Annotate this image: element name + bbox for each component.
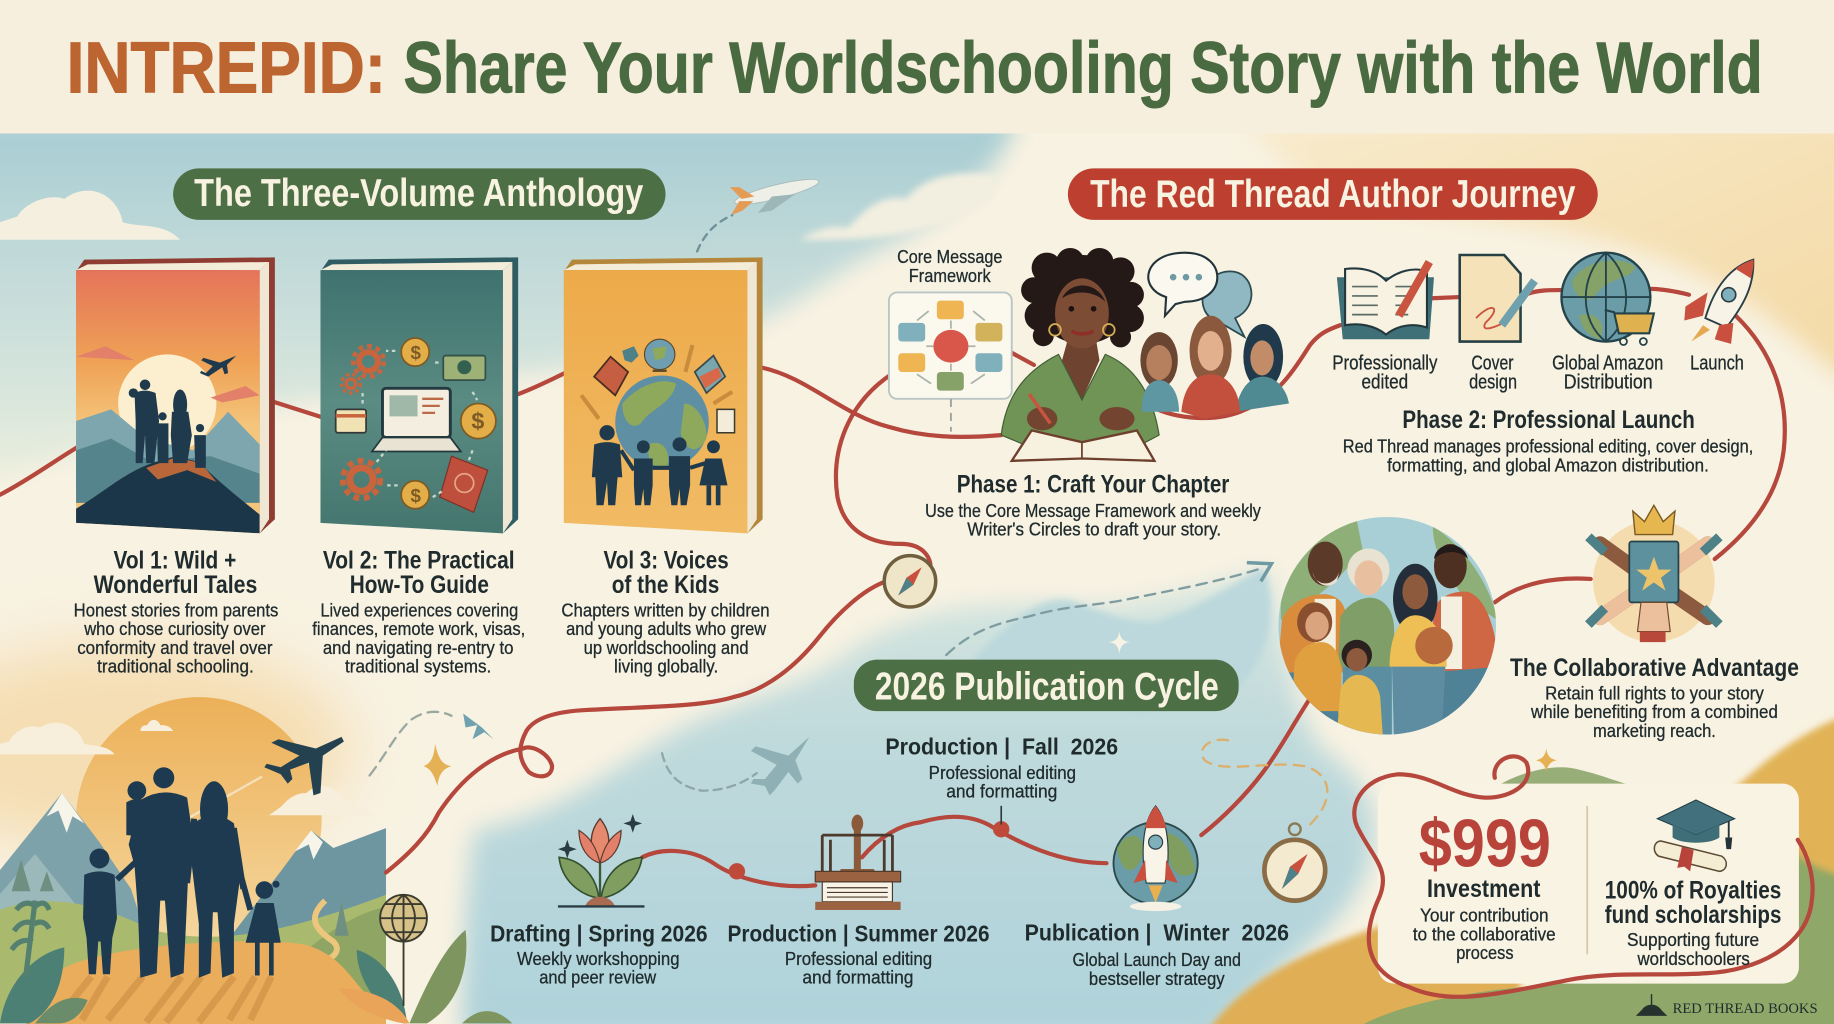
- sea wash bottom centre: [462, 567, 1374, 1024]
- fall production milestone: [885, 733, 1118, 825]
- book: volume 3: [564, 257, 763, 533]
- investment text: Investment: [1427, 876, 1540, 903]
- icon: global distribution: [1561, 253, 1654, 345]
- collaborative advantage text: marketing reach.: [1593, 721, 1716, 741]
- woman yellow top: [1392, 666, 1446, 734]
- family silhouette: [83, 767, 281, 978]
- woman white hair: [1342, 666, 1392, 734]
- icon: flower sprout: [558, 814, 644, 906]
- card thread: [1354, 756, 1813, 997]
- investment text: [1413, 876, 1556, 963]
- light plane: [751, 737, 809, 795]
- white sparkle: [1109, 632, 1130, 654]
- production summer: and formatting: [802, 968, 913, 988]
- plane: [264, 737, 344, 795]
- bottom hand: [1638, 602, 1670, 632]
- peach wash bottom left: [0, 643, 351, 854]
- top plane: [730, 175, 820, 215]
- credit card: [336, 409, 366, 433]
- crown: [1633, 505, 1675, 535]
- collaborative advantage text: while benefiting from a combined: [1530, 702, 1778, 722]
- collaborative advantage text: Retain full rights to your story: [1545, 683, 1765, 703]
- core message framework label: Framework: [909, 265, 991, 286]
- peach wash top right: [1254, 134, 1834, 386]
- green mound behind card: [1501, 767, 1626, 784]
- royalties text: fund scholarships: [1605, 902, 1781, 929]
- icon: launch rocket: [1684, 260, 1754, 344]
- cloud top centre: [800, 173, 994, 240]
- publication winter: Global Launch Day and: [1073, 950, 1241, 970]
- book: volume 2: $: [471, 408, 484, 434]
- ground: [26, 941, 398, 1024]
- royalties text: worldschoolers: [1637, 949, 1750, 969]
- production summer: [728, 921, 990, 988]
- text: volume 3: Chapters written by children: [561, 600, 770, 620]
- foreground leaves right: [357, 950, 407, 1023]
- text: volume 1: Wonderful Tales: [94, 572, 257, 599]
- text: volume 1: traditional schooling.: [97, 657, 254, 677]
- journey icon labels: Professionally: [1332, 353, 1438, 375]
- text: volume 2: Lived experiences covering: [320, 600, 518, 620]
- open book: [1012, 430, 1154, 461]
- icon: edited book: [1337, 262, 1434, 339]
- backpack right: [695, 356, 725, 393]
- red thread path: [0, 289, 1785, 886]
- journey icon labels: Global Amazon: [1552, 353, 1663, 375]
- orange route: [1202, 740, 1327, 825]
- text: volume 3: of the Kids: [612, 572, 719, 599]
- publication winter: Publication | Winter 2026: [1025, 919, 1289, 945]
- clouds: [0, 723, 115, 754]
- text: volume 2: How-To Guide: [350, 572, 489, 599]
- icon: globe rocket: [1114, 806, 1198, 911]
- title: INTREPID:: [67, 27, 386, 108]
- decorative planes and dashed routes: [370, 175, 1557, 825]
- drafting: and peer review: [539, 968, 657, 988]
- gold sparkle right: [1536, 749, 1557, 772]
- small globe: [644, 339, 675, 370]
- compass upper: [884, 556, 936, 607]
- green hills: [0, 895, 398, 1023]
- green side hill right: [1798, 851, 1834, 949]
- banknote: [443, 356, 485, 380]
- royalties text: 100% of Royalties: [1605, 877, 1781, 904]
- fall production milestone: Professional editing: [929, 763, 1076, 783]
- investment text: to the collaborative: [1413, 924, 1556, 944]
- green hill bottom right: [1364, 984, 1834, 1024]
- phase 1 text: Use the Core Message Framework and weekly: [925, 501, 1262, 521]
- orange hill bottom right: [1205, 912, 1521, 1024]
- core message framework label: Core Message: [897, 246, 1002, 267]
- note and pencils: [717, 409, 735, 433]
- pill: three-volume anthology: The Three-Volume Anthology: [194, 172, 644, 215]
- rock: [622, 346, 639, 363]
- pill: red thread author journey: The Red Thread Author Journey: [1090, 173, 1576, 216]
- foreground leaves left: [0, 947, 64, 1023]
- red thread books logo: RED THREAD BOOKS: [1673, 1001, 1818, 1017]
- girl centre: [1342, 640, 1372, 670]
- distant mountain: [974, 566, 1274, 684]
- boy left: [1297, 602, 1332, 642]
- text: volume 1: [74, 547, 278, 677]
- text: volume 3: Vol 3: Voices: [604, 547, 729, 574]
- icon: printing press: [815, 815, 901, 910]
- text: volume 2: finances, remote work, visas,: [312, 619, 525, 639]
- man right: [1441, 667, 1488, 720]
- investment card: [1354, 756, 1813, 997]
- phase 1 text: [925, 471, 1262, 540]
- speech bubbles: [1148, 253, 1251, 337]
- backpack left: [594, 357, 628, 395]
- hands and pen: [1027, 407, 1057, 430]
- timeline labels: [490, 919, 1289, 989]
- text: volume 1: conformity and travel over: [77, 638, 273, 658]
- text: volume 3: [561, 547, 770, 677]
- orange side hill right: [1732, 714, 1834, 879]
- cloud top left: [0, 191, 180, 240]
- text: volume 1: Honest stories from parents: [74, 600, 278, 620]
- book: volume 2: $: [411, 485, 422, 506]
- icon: cover design: [1460, 255, 1535, 342]
- coins: [401, 338, 429, 366]
- text: volume 3: and young adults who grew: [566, 619, 767, 639]
- book: volume 1: [76, 257, 275, 533]
- winding trail: [312, 898, 340, 959]
- investment text: process: [1456, 943, 1514, 963]
- kids silhouette: [592, 425, 728, 505]
- text: volume 2: traditional systems.: [345, 657, 491, 677]
- red thread books logo: [1638, 994, 1818, 1017]
- fall production milestone: Production | Fall 2026: [885, 733, 1118, 759]
- left pines: [12, 860, 54, 891]
- production summer: Professional editing: [785, 949, 932, 969]
- publication winter: bestseller strategy: [1089, 969, 1225, 989]
- journey icon labels: Launch: [1690, 353, 1744, 375]
- top plane route: [697, 215, 732, 251]
- journey icon labels: Distribution: [1564, 371, 1653, 393]
- drafting: Drafting | Spring 2026: [490, 921, 708, 947]
- book with star: [1629, 542, 1678, 602]
- sweater: [1001, 354, 1159, 447]
- passport: [440, 456, 488, 512]
- neck and chest: [1062, 339, 1099, 400]
- phase 2 text: Phase 2: Professional Launch: [1402, 407, 1695, 434]
- hands: [1600, 544, 1708, 618]
- text: volume 2: Vol 2: The Practical: [323, 547, 515, 574]
- icon: graduation cap: [1654, 800, 1735, 871]
- mountains: [0, 793, 138, 924]
- bottom left family landscape: [0, 697, 512, 1024]
- phase 2 text: [1343, 407, 1753, 475]
- header band: [0, 0, 1834, 133]
- phase 2 text: formatting, and global Amazon distribution.: [1387, 455, 1709, 475]
- fall production milestone: and formatting: [946, 782, 1057, 802]
- diploma: [1654, 841, 1726, 871]
- dashed arrow: [946, 568, 1261, 655]
- framework diagram: [889, 292, 1012, 432]
- light plane route: [662, 753, 757, 791]
- globe on stem: [380, 895, 427, 1006]
- collaborative hands icon: [1588, 505, 1719, 642]
- gray route: [370, 712, 451, 775]
- gold sparkle: [423, 744, 451, 786]
- ball: [1415, 627, 1453, 664]
- text: volume 1: Vol 1: Wild +: [113, 547, 236, 574]
- community circle: [1277, 517, 1499, 749]
- drafting: [490, 921, 708, 988]
- text: volume 3: living globally.: [614, 657, 718, 677]
- divider: [1586, 806, 1588, 954]
- production summer: Production | Summer 2026: [728, 921, 990, 947]
- dashed links: [363, 351, 477, 497]
- globe: [615, 375, 709, 469]
- royalties text: [1605, 877, 1781, 969]
- journey icon labels: [1332, 353, 1744, 393]
- book: volume 2: [320, 257, 518, 533]
- collaborative advantage text: [1510, 655, 1799, 741]
- royalties text: Supporting future: [1627, 930, 1759, 950]
- gears: [342, 346, 384, 498]
- phase 2 text: Red Thread manages professional editing, cover design,: [1343, 437, 1753, 457]
- drafting: Weekly workshopping: [517, 949, 680, 969]
- journey icon labels: Cover: [1471, 353, 1514, 375]
- laptop: [382, 388, 450, 437]
- author portrait: [1001, 248, 1159, 461]
- journey icon labels: edited: [1361, 371, 1408, 393]
- text: volume 2: [312, 547, 525, 677]
- text: volume 3: up worldschooling and: [584, 638, 749, 658]
- core message framework label: [897, 246, 1002, 286]
- phase 1 text: Phase 1: Craft Your Chapter: [957, 471, 1230, 498]
- card body: [1378, 784, 1799, 984]
- writers circle women: [1140, 316, 1289, 419]
- book: volume 2: $: [411, 342, 422, 363]
- elder man: [1289, 672, 1340, 724]
- compass lower: [1264, 823, 1325, 901]
- ground shadows: [58, 977, 271, 1022]
- sky wash top left: [0, 117, 1018, 491]
- pine tree: [335, 901, 349, 936]
- publication winter: [1025, 919, 1289, 989]
- plane trail: [187, 777, 262, 819]
- sun: [76, 697, 322, 943]
- face: [1055, 278, 1109, 349]
- curly hair: [1021, 248, 1144, 347]
- journey icon labels: design: [1469, 371, 1517, 393]
- price: $999: [1419, 807, 1551, 882]
- teal star plane: [463, 713, 494, 739]
- phase 1 text: Writer's Circles to draft your story.: [967, 520, 1221, 540]
- text: volume 1: who chose curiosity over: [83, 619, 266, 639]
- text: volume 2: and navigating re-entry to: [323, 638, 513, 658]
- investment text: Your contribution: [1420, 906, 1549, 926]
- pill: 2026 publication cycle: 2026 Publication Cycle: [875, 665, 1219, 708]
